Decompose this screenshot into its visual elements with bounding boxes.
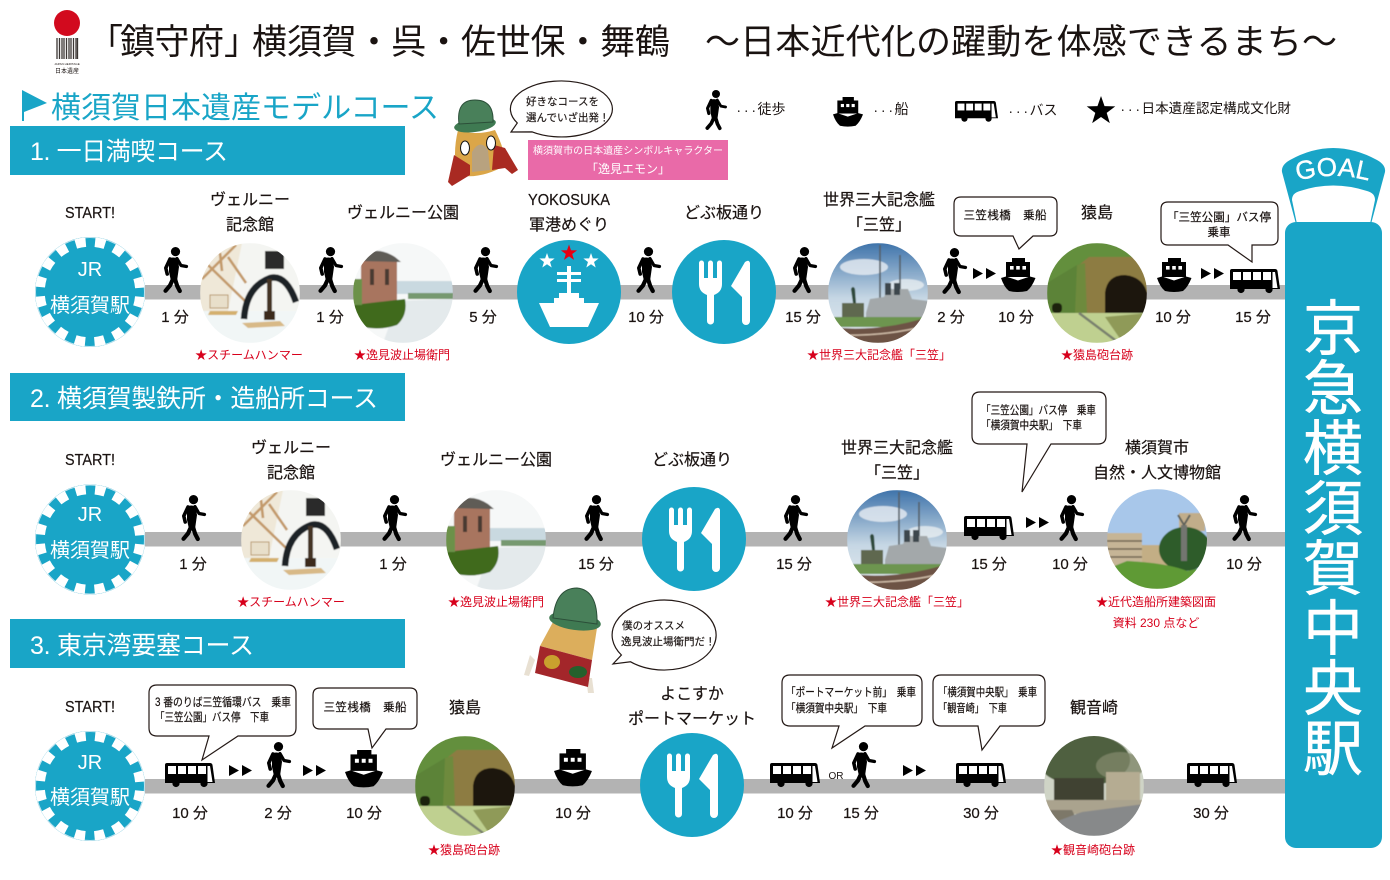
stop: Verny Park: ★逸見波止場衛門 xyxy=(448,595,544,609)
legend: walking xyxy=(707,90,786,128)
time: 10 分 xyxy=(346,805,382,822)
time: 1 分 xyxy=(179,556,207,573)
title: ～日本近代化の躍動を体感できるまち～ xyxy=(705,23,1337,62)
icon: walk xyxy=(786,495,806,539)
time: 10 分 xyxy=(998,309,1034,326)
course band 3: 3. 東京湾要塞コース xyxy=(30,632,254,660)
callout: board at Mikasa Park bus stop xyxy=(1161,202,1278,262)
time: 30 分 xyxy=(963,805,999,822)
callout: Port Market to Yokosuka-Chuo xyxy=(782,675,922,748)
callout: board at Mikasa pier: 三笠桟橋 乗船 xyxy=(324,700,407,714)
stop: Verny Museum: 記念館 xyxy=(226,216,274,234)
icon: bus xyxy=(165,763,215,787)
stop: Verny Museum: ヴェルニー xyxy=(251,439,331,457)
stop: Kannonzaki xyxy=(1038,699,1144,857)
icon: boat xyxy=(1157,258,1192,292)
time: 10 分 xyxy=(172,805,208,822)
stop: Verny Museum xyxy=(237,439,345,609)
stop: Sarushima: 猿島 xyxy=(1081,204,1113,222)
title: 」 xyxy=(224,23,259,62)
stop: Battleship Mikasa: 世界三大記念艦 xyxy=(841,439,953,457)
stop: Dobuita street xyxy=(672,204,776,344)
stop: Sarushima xyxy=(1047,204,1147,362)
legend: bus: ・・・バス xyxy=(1007,102,1058,118)
stop: Verny Park: ヴェルニー公園 xyxy=(440,451,552,469)
icon: walk xyxy=(638,247,660,291)
callout: board at Mikasa pier xyxy=(954,197,1057,249)
course band 2: 2. 横須賀製鉄所・造船所コース xyxy=(30,385,378,413)
or label: OR xyxy=(828,771,844,782)
start station: JR Yokosuka xyxy=(35,731,145,841)
stop: Yokosuka naval port cruise xyxy=(517,192,621,344)
time: 15 分 xyxy=(578,556,614,573)
arrows xyxy=(903,765,926,776)
start station: JR Yokosuka: 横須賀駅 xyxy=(50,786,130,809)
callout: Yokosuka-Chuo to Kannonzaki: 「観音崎」 下車 xyxy=(938,701,1007,715)
mascot: Hemi Emon with speech bubble xyxy=(448,81,728,186)
station name: 横 xyxy=(1303,416,1363,483)
time: 1 分 xyxy=(379,556,407,573)
legend: heritage star xyxy=(1087,96,1291,123)
icon: walk xyxy=(476,247,496,291)
goal: Keikyu Yokosuka-Chuo station strap xyxy=(1282,148,1386,848)
stop: City natural and cultural museum: 資料 230 点など xyxy=(1113,616,1199,630)
stop: Battleship Mikasa: ★世界三大記念艦「三笠」 xyxy=(807,347,951,362)
stop: Sarushima: 猿島 xyxy=(449,699,481,717)
callout: Mikasa Park to Yokosuka-Chuo xyxy=(972,392,1106,492)
icon: walk xyxy=(1062,495,1082,539)
time: 10 分 xyxy=(1226,556,1262,573)
start station: JR Yokosuka xyxy=(35,237,145,347)
stop: Yokosuka naval port cruise: 軍港めぐり xyxy=(529,216,609,234)
time: 10 分 xyxy=(628,309,664,326)
callout: Mikasa Park to Yokosuka-Chuo: 「三笠公園」バス停 乗車 xyxy=(981,403,1096,417)
caption: mascot name xyxy=(528,140,728,180)
route 1 xyxy=(35,191,1290,362)
callout: board at Mikasa Park bus stop: 「三笠公園」バス停 xyxy=(1167,210,1272,224)
callout: board at Mikasa pier xyxy=(313,688,417,748)
start station: JR Yokosuka: JR xyxy=(78,259,102,281)
icon: walk xyxy=(166,247,186,291)
stop: Kannonzaki: ★観音崎砲台跡 xyxy=(1051,842,1135,857)
station name: 須 xyxy=(1303,476,1363,543)
time: 10 分 xyxy=(777,805,813,822)
callout: board at Mikasa Park bus stop: 乗車 xyxy=(1208,225,1230,239)
icon: bus xyxy=(1230,269,1280,293)
icon: walk xyxy=(320,247,342,291)
icon: boat xyxy=(554,749,592,786)
callout: Yokosuka-Chuo to Kannonzaki xyxy=(933,675,1045,750)
start station: JR Yokosuka: 横須賀駅 xyxy=(50,294,130,317)
stop: Battleship Mikasa: 「三笠」 xyxy=(847,216,911,234)
callout: loop bus xyxy=(149,685,296,760)
stop: Verny Park: ヴェルニー公園 xyxy=(347,204,459,222)
icon: walk xyxy=(854,742,874,786)
course band 1 xyxy=(10,126,405,175)
speech bubble: recommendation xyxy=(612,600,716,670)
icon: bus xyxy=(1187,763,1237,787)
time: 1 分 xyxy=(161,309,189,326)
callout: loop bus: 3 番のりば三笠循環バス 乗車 xyxy=(155,695,291,709)
legend: bus xyxy=(955,101,1058,122)
speech bubble: choose a course: 選んでいざ出発！ xyxy=(526,111,609,124)
legend: boat: ・・・船 xyxy=(872,101,908,117)
icon: bus xyxy=(964,516,1014,540)
stop: Yokosuka Port Market xyxy=(628,685,756,837)
station name: 急 xyxy=(1303,356,1363,423)
stop: Sarushima xyxy=(415,699,515,857)
stop: City natural and cultural museum: ★近代造船所建築図面 xyxy=(1096,594,1216,609)
time: 5 分 xyxy=(469,309,497,326)
stop: City natural and cultural museum: 自然・人文博物館 xyxy=(1093,464,1221,482)
start label: START! xyxy=(65,699,115,716)
caption: mascot name: 横須賀市の日本遺産シンボルキャラクター xyxy=(533,144,723,157)
time: 1 分 xyxy=(316,309,344,326)
time: 10 分 xyxy=(555,805,591,822)
time: 10 分 xyxy=(1052,556,1088,573)
legend xyxy=(707,90,1291,128)
station name: 中 xyxy=(1303,596,1363,663)
icon: walk xyxy=(384,495,406,539)
arrows xyxy=(1026,517,1049,528)
logo: Japan Heritage: JAPAN HERITAGE xyxy=(54,62,80,66)
stop: Dobuita street xyxy=(642,451,746,591)
speech bubble: choose a course: 好きなコースを xyxy=(526,95,599,108)
stop: Dobuita street: どぶ板通り xyxy=(652,451,732,469)
legend: boat xyxy=(833,97,908,127)
start label: START! xyxy=(65,205,115,222)
arrows xyxy=(303,765,326,776)
title xyxy=(88,23,1337,62)
stop: Battleship Mikasa xyxy=(825,439,969,609)
stop: Verny Museum: ヴェルニー xyxy=(210,191,290,209)
icon: walk xyxy=(1234,495,1256,539)
time: 2 分 xyxy=(937,309,965,326)
start station: JR Yokosuka: JR xyxy=(78,752,102,774)
route 3 xyxy=(35,675,1290,857)
stop: Dobuita street: どぶ板通り xyxy=(684,204,764,222)
course band 2 xyxy=(10,373,405,421)
time: 30 分 xyxy=(1193,805,1229,822)
stop: Yokosuka Port Market: よこすか xyxy=(660,685,724,703)
arrows xyxy=(1201,268,1224,279)
icon: boat xyxy=(345,750,383,787)
stop: Battleship Mikasa: 世界三大記念艦 xyxy=(823,191,935,209)
station name: 京 xyxy=(1303,296,1363,363)
start station: JR Yokosuka: JR xyxy=(78,504,102,526)
legend: walking: ・・・徒歩 xyxy=(735,101,786,117)
time: 10 分 xyxy=(1155,309,1191,326)
icon: boat xyxy=(1001,258,1036,292)
time: 15 分 xyxy=(776,556,812,573)
speech bubble: choose a course xyxy=(510,81,612,137)
stop: Yokosuka Port Market: ポートマーケット xyxy=(628,710,756,728)
course band 1: 1. 一日満喫コース xyxy=(30,138,228,166)
icon: walk xyxy=(184,495,204,539)
stop: Verny Museum: ★スチームハンマー xyxy=(237,595,345,609)
stop: Verny Museum: 記念館 xyxy=(267,464,315,482)
icon: bus xyxy=(770,763,820,787)
stop: Verny Park: ★逸見波止場衛門 xyxy=(354,348,450,362)
caption: mascot name: 「逸見エモン」 xyxy=(586,162,670,176)
logo: Japan Heritage xyxy=(54,10,80,75)
callout: Mikasa Park to Yokosuka-Chuo: 「横須賀中央駅」 下車 xyxy=(981,418,1082,432)
speech bubble: recommendation: 逸見波止場衛門だ！ xyxy=(621,635,716,648)
stop: Battleship Mikasa: ★世界三大記念艦「三笠」 xyxy=(825,594,969,609)
arrows xyxy=(229,765,252,776)
stop: City natural and cultural museum: 横須賀市 xyxy=(1125,439,1189,457)
time: 15 分 xyxy=(971,556,1007,573)
legend: heritage star: ・・・日本遺産認定構成文化財 xyxy=(1119,101,1291,116)
stop: Yokosuka naval port cruise: YOKOSUKA xyxy=(528,192,610,209)
stop: Kannonzaki: 観音崎 xyxy=(1070,699,1118,717)
time: 15 分 xyxy=(785,309,821,326)
heading: model course: 横須賀日本遺産モデルコース xyxy=(51,92,439,125)
stop: Sarushima: ★猿島砲台跡 xyxy=(428,842,500,857)
stop: Sarushima: ★猿島砲台跡 xyxy=(1061,347,1133,362)
stop: City natural and cultural museum xyxy=(1093,439,1221,630)
callout: loop bus: 「三笠公園」バス停 下車 xyxy=(155,710,269,724)
goal label: GOAL xyxy=(1296,158,1368,181)
title: 「 xyxy=(88,23,123,62)
time: 2 分 xyxy=(264,805,292,822)
title: 鎮守府 xyxy=(120,23,224,62)
icon: walk xyxy=(944,248,966,292)
mascot: back view with speech bubble xyxy=(524,588,716,693)
callout: Yokosuka-Chuo to Kannonzaki: 「横須賀中央駅」 乗車 xyxy=(938,685,1037,699)
station name: 賀 xyxy=(1303,536,1363,603)
stop: Verny Museum xyxy=(195,191,303,362)
icon: walk xyxy=(794,247,816,291)
time: 15 分 xyxy=(1235,309,1271,326)
icon: bus xyxy=(956,763,1006,787)
time: 15 分 xyxy=(843,805,879,822)
icon: walk xyxy=(268,742,290,786)
icon: walk xyxy=(586,495,608,539)
logo: Japan Heritage: 日本遺産 xyxy=(55,67,79,75)
stop: Verny Museum: ★スチームハンマー xyxy=(195,348,303,362)
callout: Port Market to Yokosuka-Chuo: 「横須賀中央駅」 下車 xyxy=(786,701,887,715)
stop: Verny Park xyxy=(440,451,552,609)
stop: Battleship Mikasa: 「三笠」 xyxy=(865,464,929,482)
start label: START! xyxy=(65,452,115,469)
speech bubble: recommendation: 僕のオススメ xyxy=(622,619,685,632)
start station: JR Yokosuka xyxy=(35,484,145,594)
stop: Verny Park xyxy=(347,204,459,362)
route 2 xyxy=(35,392,1290,630)
start station: JR Yokosuka: 横須賀駅 xyxy=(50,539,130,562)
stop: Battleship Mikasa xyxy=(807,191,951,362)
icon: flag xyxy=(22,90,47,121)
title: 横須賀・呉・佐世保・舞鶴 xyxy=(252,23,670,62)
callout: Port Market to Yokosuka-Chuo: 「ポートマーケット前」 乗車 xyxy=(786,685,916,699)
course band 3 xyxy=(10,619,405,668)
callout: board at Mikasa pier: 三笠桟橋 乗船 xyxy=(964,208,1047,222)
station name: 駅 xyxy=(1303,716,1363,783)
arrows xyxy=(973,268,996,279)
station name: 央 xyxy=(1303,656,1363,723)
